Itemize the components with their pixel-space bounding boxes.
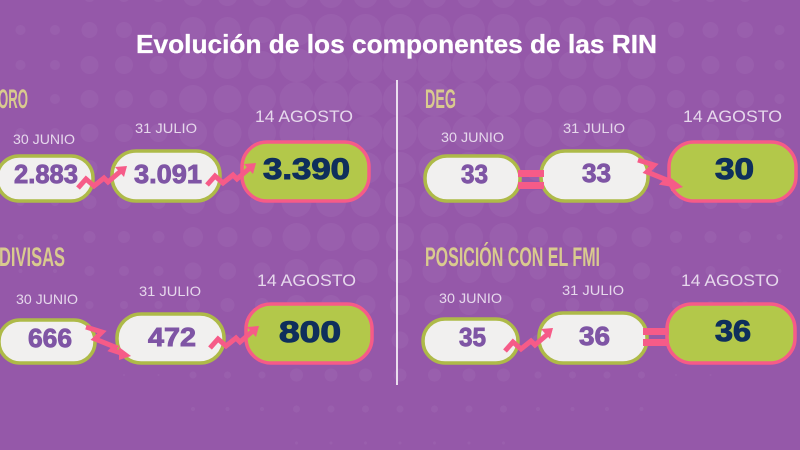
oro 30 junio	[0, 131, 93, 201]
arrow: down	[638, 160, 683, 191]
heading: posicion con el fmi: POSICIÓN CON EL FMI	[425, 241, 600, 272]
divisas 31 julio	[117, 283, 224, 363]
divisas 31 julio: 31 JULIO	[139, 283, 201, 299]
deg 31 julio	[541, 120, 648, 201]
panel: divisas	[0, 242, 372, 363]
panel: oro	[0, 84, 369, 201]
fmi 30 junio	[423, 290, 518, 363]
divisas 14 agosto: 14 AGOSTO	[257, 271, 356, 290]
oro 31 julio: 3.091	[134, 159, 202, 189]
heading: deg: DEG	[425, 84, 456, 114]
oro 31 julio	[112, 120, 220, 201]
divisas 31 julio: 472	[148, 322, 196, 352]
title: Evolución de los componentes de las RIN	[136, 29, 657, 59]
divisas 30 junio	[0, 291, 95, 363]
deg 30 junio: 33	[461, 159, 488, 189]
divisas 14 agosto	[246, 271, 372, 363]
arrow: up	[207, 163, 256, 185]
arrow: up	[210, 326, 259, 348]
fmi 31 julio: 31 JULIO	[562, 282, 624, 298]
fmi 14 agosto: 36	[715, 315, 751, 348]
oro 14 agosto: 3.390	[263, 153, 350, 186]
oro 30 junio: 30 JUNIO	[13, 131, 75, 147]
deg 14 agosto: 30	[715, 153, 754, 186]
deg 30 junio	[425, 129, 520, 201]
deg 30 junio: 30 JUNIO	[441, 129, 504, 145]
arrow: down	[86, 327, 131, 360]
equals sign	[643, 328, 669, 346]
panel: posicion con el fmi	[423, 241, 795, 363]
equals sign	[518, 170, 544, 189]
arrow: up	[505, 328, 553, 351]
deg 14 agosto: 14 AGOSTO	[683, 107, 782, 126]
deg 31 julio: 33	[582, 158, 611, 188]
heading: divisas: DIVISAS	[0, 242, 65, 272]
divisas 14 agosto: 800	[279, 316, 341, 349]
fmi 30 junio: 35	[459, 322, 486, 352]
oro 14 agosto: 14 AGOSTO	[255, 107, 353, 126]
fmi 30 junio: 30 JUNIO	[439, 290, 502, 306]
arrow: up	[78, 166, 127, 188]
panel: deg	[425, 84, 796, 201]
fmi 31 julio	[539, 282, 647, 363]
central divider	[396, 80, 398, 385]
divisas 30 junio: 666	[28, 323, 72, 353]
deg 14 agosto	[669, 107, 796, 201]
oro 31 julio: 31 JULIO	[135, 120, 197, 136]
divisas 30 junio: 30 JUNIO	[16, 291, 78, 307]
fmi 31 julio: 36	[579, 321, 610, 351]
oro 14 agosto	[242, 107, 369, 201]
fmi 14 agosto	[667, 271, 795, 363]
oro 30 junio: 2.883	[14, 159, 78, 189]
deg 31 julio: 31 JULIO	[563, 120, 625, 136]
fmi 14 agosto: 14 AGOSTO	[681, 271, 779, 290]
